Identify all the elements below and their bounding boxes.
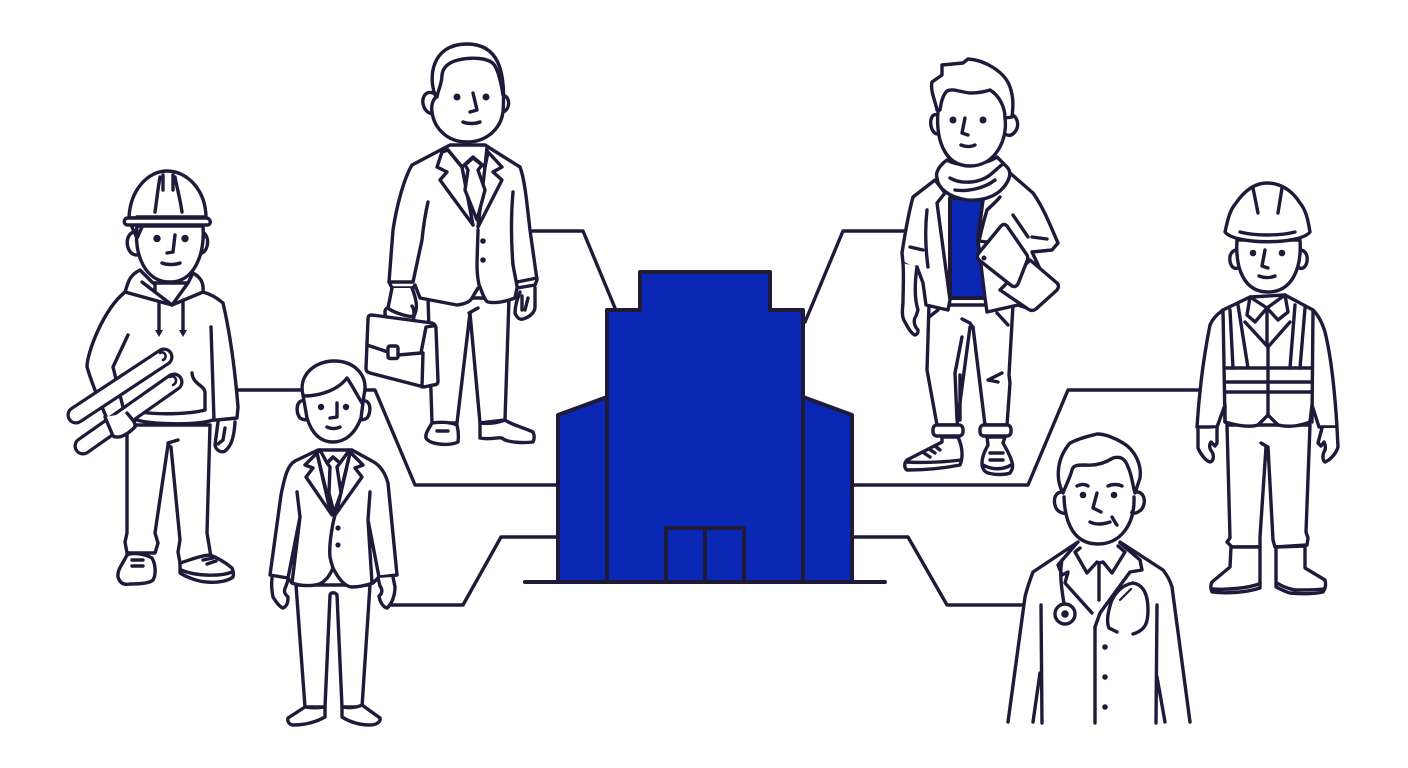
person: worker in safety vest <box>1197 183 1338 594</box>
hoodie <box>87 270 238 425</box>
head and hard hat <box>124 171 210 282</box>
pants and shoes <box>905 305 1013 474</box>
stethoscope <box>1055 560 1148 634</box>
briefcase <box>366 306 438 387</box>
scarf <box>937 157 1010 200</box>
head <box>1054 434 1144 544</box>
jacket <box>270 450 397 587</box>
blueprint rolls <box>76 352 176 446</box>
jacket <box>902 173 1058 312</box>
head <box>931 59 1018 166</box>
hands <box>272 578 288 608</box>
lab coat <box>1008 542 1190 723</box>
tablets <box>977 224 1058 310</box>
head <box>423 44 509 142</box>
forearm and left hand <box>902 263 918 335</box>
pants and shoes <box>118 425 233 584</box>
pants and shoes <box>288 585 380 725</box>
head and hard hat <box>1225 183 1310 292</box>
collar <box>1247 295 1288 322</box>
shirt collar <box>1075 546 1125 573</box>
hands <box>1198 428 1217 462</box>
person: businessman with briefcase <box>366 44 537 444</box>
central building <box>525 272 885 582</box>
person: student with scarf and tablets <box>902 59 1058 474</box>
head <box>297 361 370 442</box>
person: construction worker with blueprints <box>76 171 238 584</box>
pants and boots <box>1211 425 1326 594</box>
person: doctor with stethoscope <box>1008 434 1190 723</box>
left hand <box>105 413 135 437</box>
connector lines <box>238 231 1198 605</box>
jacket <box>389 145 537 305</box>
arms and body <box>1197 295 1337 427</box>
hi-vis vest details <box>1223 305 1313 422</box>
blue shirt <box>950 198 987 298</box>
person: young man in suit <box>270 361 397 725</box>
hands <box>388 288 416 316</box>
pants and shoes <box>426 298 534 444</box>
right hand <box>215 422 235 452</box>
